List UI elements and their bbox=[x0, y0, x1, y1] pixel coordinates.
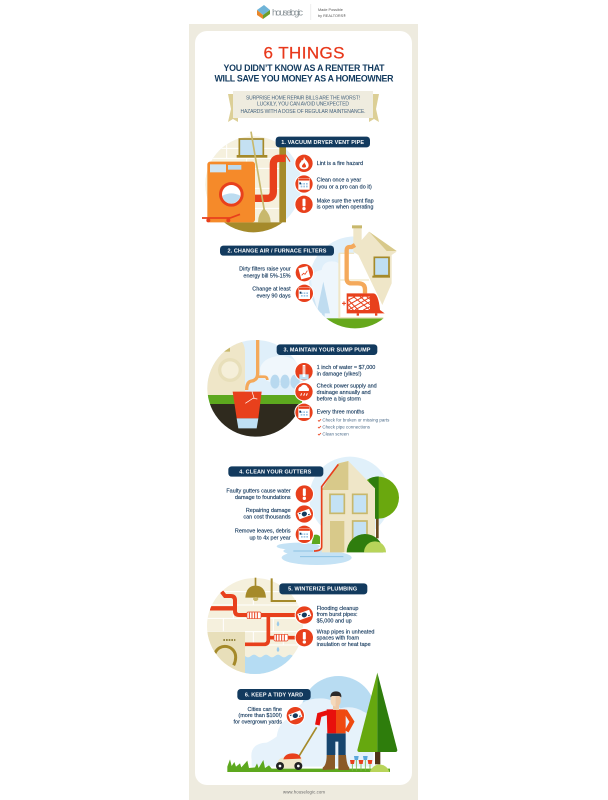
icon: thermometer gauge bbox=[294, 362, 314, 381]
intro ribbon: HAZARDS WITH A DOSE OF REGULAR MAINTENANCE. bbox=[240, 109, 366, 115]
checklist: Clean screen bbox=[322, 431, 349, 436]
illustration: house and furnace bbox=[309, 225, 396, 328]
icon: bill bbox=[295, 263, 314, 282]
checklist: Check for broken or missing parts bbox=[322, 418, 390, 423]
text: check power: before a big storm bbox=[317, 396, 361, 402]
icon: money bbox=[295, 504, 314, 524]
heading pill 1 bbox=[276, 137, 370, 147]
heading pill 4: 4. CLEAN YOUR GUTTERS bbox=[239, 470, 312, 476]
text: check power: Check power supply and bbox=[317, 384, 377, 390]
heading pill 6: 6. KEEP A TIDY YARD bbox=[245, 692, 303, 698]
text: repairing damage bbox=[243, 508, 291, 520]
text: cities can fine: for overgrown yards bbox=[234, 719, 282, 725]
illustration: house with gutter bbox=[277, 457, 399, 565]
text: change at least: Change at least bbox=[252, 287, 291, 293]
text: flooding cleanup bbox=[317, 606, 358, 625]
icon: exclamation bbox=[295, 628, 314, 647]
section 2: change air furnace filters bbox=[220, 225, 403, 332]
text: clean once a year: (you or a pro can do it) bbox=[317, 184, 372, 190]
white content card bbox=[195, 31, 412, 785]
text: check power bbox=[317, 384, 377, 402]
icon: money bbox=[295, 605, 314, 625]
text: faulty gutters: Faulty gutters cause water bbox=[226, 489, 291, 495]
text: dirty filters: Dirty filters raise your bbox=[239, 267, 291, 273]
text: flooding cleanup: from burst pipes: bbox=[317, 612, 358, 618]
heading pill 3 bbox=[277, 344, 377, 355]
text: inch of water: in damage (yikes!) bbox=[317, 371, 362, 377]
header divider bbox=[310, 4, 312, 20]
text: cities can fine bbox=[234, 707, 282, 725]
section 3: maintain your sump pump bbox=[207, 338, 390, 438]
header sponsor text bbox=[318, 8, 346, 18]
heading pill 2: 2. CHANGE AIR / FURNACE FILTERS bbox=[227, 249, 327, 255]
text: vent flap: is open when operating bbox=[317, 205, 373, 211]
text: lint: Lint is a fire hazard bbox=[317, 161, 363, 167]
text: clean once a year: Clean once a year bbox=[317, 178, 361, 184]
text: wrap pipes: Wrap pipes in unheated bbox=[317, 629, 375, 635]
text: inch of water: 1 inch of water = $7,000 bbox=[317, 365, 375, 371]
intro ribbon: SURPRISE HOME REPAIR BILLS ARE THE WORST! bbox=[246, 96, 360, 102]
icon: money bbox=[286, 706, 305, 725]
text: dirty filters: energy bill 5%-15% bbox=[243, 273, 291, 279]
heading pill 6 bbox=[237, 689, 311, 700]
icon: calendar bbox=[295, 284, 314, 303]
text: remove leaves: up to 4x per year bbox=[249, 535, 291, 541]
heading pill 5 bbox=[279, 583, 367, 594]
text: change at least: every 90 days bbox=[257, 293, 291, 299]
text: inch of water bbox=[317, 365, 375, 377]
text: repairing damage: can cost thousands bbox=[243, 514, 291, 520]
text: flooding cleanup: Flooding cleanup bbox=[317, 606, 358, 612]
illustration: person mowing lawn bbox=[227, 673, 397, 772]
text: check power: drainage annually and bbox=[317, 390, 371, 396]
title bbox=[214, 44, 394, 84]
icon: calendar bbox=[294, 403, 314, 422]
text: cities can fine: (more than $100!) bbox=[238, 713, 282, 719]
text: remove leaves bbox=[235, 529, 291, 541]
text: repairing damage: Repairing damage bbox=[246, 508, 291, 514]
intro ribbon bbox=[228, 91, 379, 122]
heading pill 2 bbox=[220, 246, 334, 256]
icon: storm cloud bbox=[294, 382, 314, 401]
header logo: houselogic: houselogic bbox=[272, 8, 303, 18]
text: faulty gutters: damage to foundations bbox=[235, 495, 291, 501]
icon: calendar bbox=[294, 174, 314, 194]
text: clean once a year bbox=[317, 178, 372, 190]
illustration: burst pipes bbox=[207, 578, 305, 677]
header sponsor text: Made Possible bbox=[318, 8, 343, 12]
icon: calendar bbox=[295, 525, 314, 544]
text: wrap pipes: spaces with foam bbox=[317, 636, 359, 642]
text: wrap pipes bbox=[317, 629, 375, 648]
page background column bbox=[189, 24, 418, 800]
text: vent flap bbox=[317, 198, 374, 211]
text: cities can fine: Cities can fine bbox=[248, 707, 282, 713]
text: faulty gutters bbox=[226, 489, 291, 501]
heading pill 3: 3. MAINTAIN YOUR SUMP PUMP bbox=[283, 348, 371, 354]
header sponsor text: by REALTORS® bbox=[318, 14, 346, 18]
title: WILL SAVE YOU MONEY AS A HOMEOWNER bbox=[214, 74, 394, 84]
illustration: dryer and vent bbox=[202, 132, 303, 236]
heading pill 4 bbox=[228, 466, 323, 477]
illustration: sump pump bbox=[207, 338, 307, 438]
heading pill 1: 1. VACUUM DRYER VENT PIPE bbox=[281, 140, 364, 146]
title: 6 THINGS bbox=[264, 44, 344, 62]
text: wrap pipes: insulation or heat tape bbox=[317, 642, 371, 648]
text: every three months: Every three months bbox=[317, 410, 364, 416]
section 6: keep a tidy yard bbox=[227, 673, 397, 772]
heading pill 5: 5. WINTERIZE PLUMBING bbox=[288, 587, 357, 593]
text: remove leaves: Remove leaves, debris bbox=[235, 529, 291, 535]
icon: exclamation bbox=[294, 195, 314, 214]
text: dirty filters bbox=[239, 267, 291, 279]
checklist: Check pipe connections bbox=[322, 424, 371, 429]
section 4: clean your gutters bbox=[226, 457, 399, 565]
section 5: winterize plumbing bbox=[207, 578, 375, 677]
title: YOU DIDN’T KNOW AS A RENTER THAT bbox=[224, 63, 385, 73]
text: change at least bbox=[252, 287, 291, 299]
section 1: vacuum dryer vent pipe bbox=[202, 132, 374, 236]
footer url: www.houselogic.com bbox=[283, 790, 325, 794]
text: flooding cleanup: $5,000 and up bbox=[317, 619, 352, 625]
icon: flame bbox=[294, 154, 314, 173]
intro ribbon: LUCKILY, YOU CAN AVOID UNEXPECTED bbox=[257, 102, 349, 108]
icon: exclamation bbox=[295, 484, 314, 504]
header logo: houselogic bbox=[257, 5, 303, 19]
text: vent flap: Make sure the vent flap bbox=[317, 198, 374, 204]
checklist bbox=[318, 418, 390, 436]
